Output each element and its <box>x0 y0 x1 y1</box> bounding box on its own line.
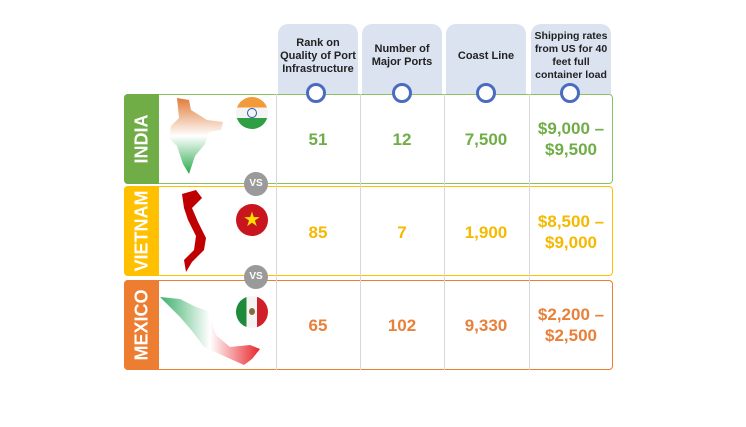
header: shipping: Shipping rates from US for 40 feet full container load <box>535 30 607 81</box>
text: $8,500 – <box>538 212 604 231</box>
tab: Mexico: MEXICO <box>131 289 151 361</box>
text: 102 <box>388 316 416 335</box>
map: Mexico <box>160 297 260 365</box>
flag: India <box>236 97 268 129</box>
vs badge 2 <box>244 265 268 289</box>
icon: shipping <box>560 83 580 103</box>
header: ports <box>362 24 442 96</box>
text: 9,330 <box>465 316 507 335</box>
icon: coast <box>476 83 496 103</box>
tab: India <box>124 94 159 184</box>
header: rank <box>278 24 358 96</box>
text: 7,500 <box>465 130 507 149</box>
map: Vietnam <box>182 190 206 272</box>
text: 65 <box>309 316 327 335</box>
tab: Mexico <box>124 280 159 370</box>
vs badge 1 <box>244 172 268 196</box>
text: 12 <box>393 130 411 149</box>
text: $2,200 – <box>538 305 604 324</box>
row: Mexico <box>124 280 613 370</box>
header: shipping <box>531 24 611 96</box>
vs badge 1: VS <box>249 178 263 189</box>
text: 85 <box>309 223 327 242</box>
tab: Vietnam: VIETNAM <box>131 190 151 272</box>
row: Vietnam <box>124 186 613 276</box>
values: Mexico <box>309 305 604 345</box>
icon: rank <box>306 83 326 103</box>
vs badge 2: VS <box>249 271 263 282</box>
values: India <box>309 119 604 159</box>
text: $9,000 <box>545 233 597 252</box>
text: $9,000 – <box>538 119 604 138</box>
header: coast: Coast Line <box>458 50 514 62</box>
icon: ports <box>392 83 412 103</box>
map: India <box>169 98 223 174</box>
header: rank: Quality of Port <box>280 50 356 62</box>
header: rank: Infrastructure <box>282 62 354 74</box>
text: 51 <box>309 130 327 149</box>
header: ports: Number of Major Ports <box>372 43 432 68</box>
values: Vietnam <box>309 212 604 252</box>
flag: Mexico <box>236 296 268 328</box>
text: $9,500 <box>545 140 597 159</box>
header: coast <box>446 24 526 96</box>
flag: Vietnam: ★ <box>243 209 261 231</box>
row: India <box>124 94 613 184</box>
text: 7 <box>397 223 407 242</box>
text: $2,500 <box>545 326 597 345</box>
flag: Vietnam <box>236 204 268 236</box>
text: 1,900 <box>465 223 507 242</box>
header: rank: Rank on <box>296 36 340 48</box>
tab: India: INDIA <box>131 114 151 164</box>
tab: Vietnam <box>124 186 159 276</box>
